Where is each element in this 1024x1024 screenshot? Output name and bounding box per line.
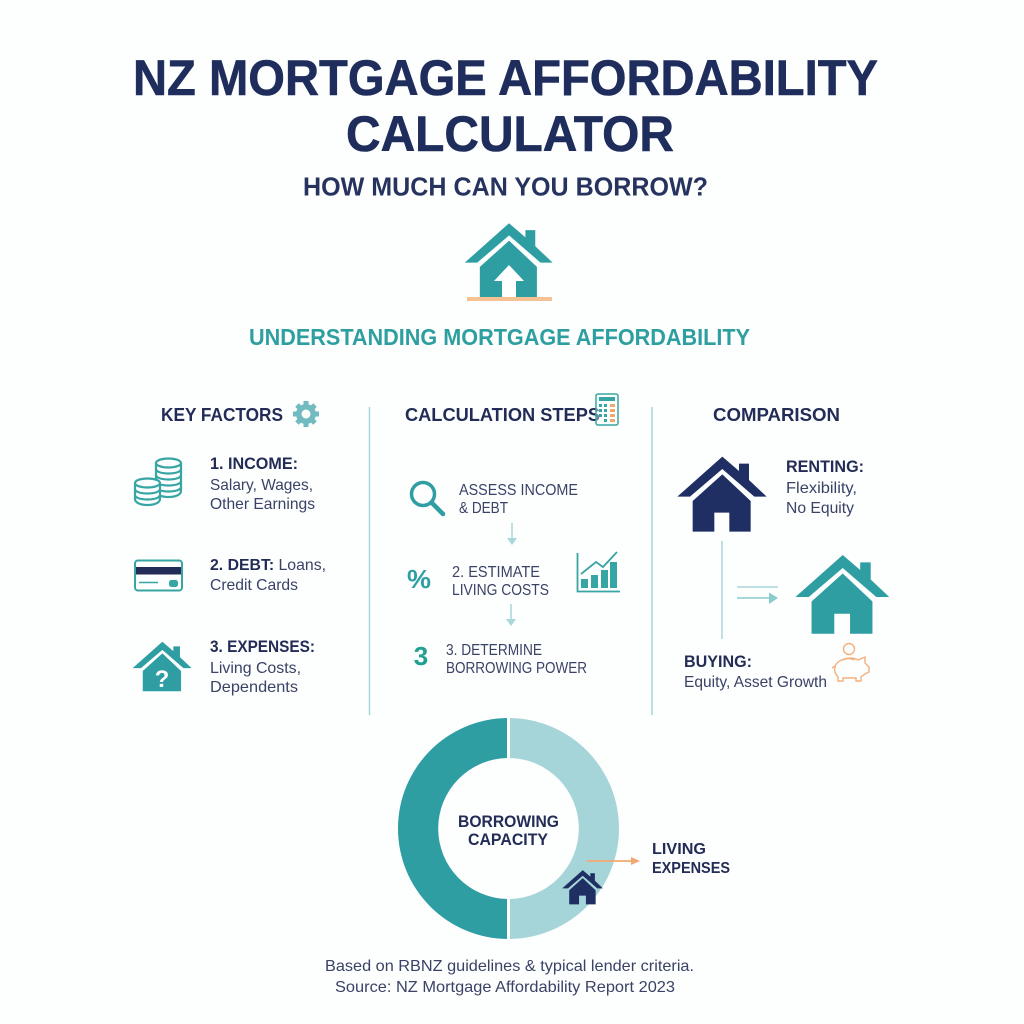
source footer: [325, 958, 694, 996]
panel: comparison: [677, 405, 889, 691]
renting text: Flexibility,: [786, 480, 857, 497]
vertical connector: [721, 541, 723, 639]
icon: house with question mark: ?: [155, 666, 169, 693]
label: living expenses: [652, 841, 730, 877]
donut label: BORROWING: [458, 813, 559, 831]
segment: left: [398, 718, 507, 939]
buying text: BUYING:: [684, 652, 752, 671]
renting text: [786, 457, 864, 517]
step 1: [459, 482, 578, 517]
factor 3: expenses: Dependents: [210, 679, 298, 696]
donut chart: borrowing capacity: [398, 718, 730, 939]
source footer: Based on RBNZ guidelines & typical lender criteria.: [325, 958, 694, 975]
icon: number three: 3: [414, 641, 428, 671]
icon: coins: [135, 458, 181, 505]
step 1: & DEBT: [459, 500, 508, 517]
divider right: [651, 407, 653, 715]
heading: key factors: KEY FACTORS: [161, 405, 283, 425]
buying text: [684, 652, 827, 691]
renting text: No Equity: [786, 500, 854, 517]
step 2: LIVING COSTS: [452, 582, 549, 599]
icon: house with up arrow: [465, 223, 553, 301]
heading: comparison: COMPARISON: [713, 405, 840, 425]
icon: magnifying glass: [412, 482, 443, 514]
factor 2: debt: Credit Cards: [210, 577, 298, 594]
label: living expenses: LIVING: [652, 841, 706, 858]
donut label: CAPACITY: [468, 831, 548, 849]
icon: credit card: [135, 560, 182, 590]
step 3: BORROWING POWER: [446, 660, 587, 677]
icon: piggy bank: [832, 644, 869, 681]
factor 3: expenses: Living Costs,: [210, 660, 301, 677]
icon: small navy house: [562, 870, 603, 904]
buying text: Equity, Asset Growth: [684, 674, 827, 691]
factor 1: income: Salary, Wages,: [210, 477, 313, 494]
factor 1: income: [210, 454, 315, 513]
segment: right: [510, 718, 619, 939]
panel: key factors: [133, 401, 326, 696]
source footer: Source: NZ Mortgage Affordability Report 2023: [335, 979, 675, 996]
factor 2: debt: [210, 557, 326, 594]
heading: calculation steps: CALCULATION STEPS: [405, 405, 600, 425]
renting text: RENTING:: [786, 457, 864, 476]
section heading: UNDERSTANDING MORTGAGE AFFORDABILITY: [249, 324, 750, 350]
arrow down: [506, 604, 516, 626]
icon: calculator: [596, 394, 618, 425]
panel: calculation steps: [405, 394, 620, 677]
factor 1: income: 1. INCOME:: [210, 454, 298, 473]
step 1: ASSESS INCOME: [459, 482, 578, 499]
title: CALCULATOR: [346, 106, 674, 162]
arrow to buying: [737, 587, 778, 604]
step 3: 3. DETERMINE: [446, 642, 542, 659]
icon: navy house: [677, 457, 767, 532]
step 2: [452, 564, 549, 599]
title: [133, 50, 878, 162]
factor 3: expenses: [210, 637, 315, 696]
donut label: [458, 813, 559, 849]
factor 2: debt: 2. DEBT: Loans,: [210, 557, 326, 574]
icon: growth chart: [578, 552, 620, 592]
icon: percent: %: [407, 564, 431, 594]
factor 3: expenses: 3. EXPENSES:: [210, 637, 315, 656]
icon: house with question mark: [133, 642, 192, 693]
icon: gear: [293, 401, 319, 427]
label: living expenses: EXPENSES: [652, 860, 730, 877]
arrow: orange pointer: [587, 857, 640, 865]
subtitle: HOW MUCH CAN YOU BORROW?: [303, 174, 708, 202]
icon: teal house: [795, 555, 889, 634]
divider left: [368, 407, 370, 715]
arrow down: [507, 523, 517, 545]
factor 1: income: Other Earnings: [210, 496, 315, 513]
step 2: 2. ESTIMATE: [452, 564, 540, 581]
step 3: [446, 642, 587, 677]
title: NZ MORTGAGE AFFORDABILITY: [133, 50, 878, 106]
